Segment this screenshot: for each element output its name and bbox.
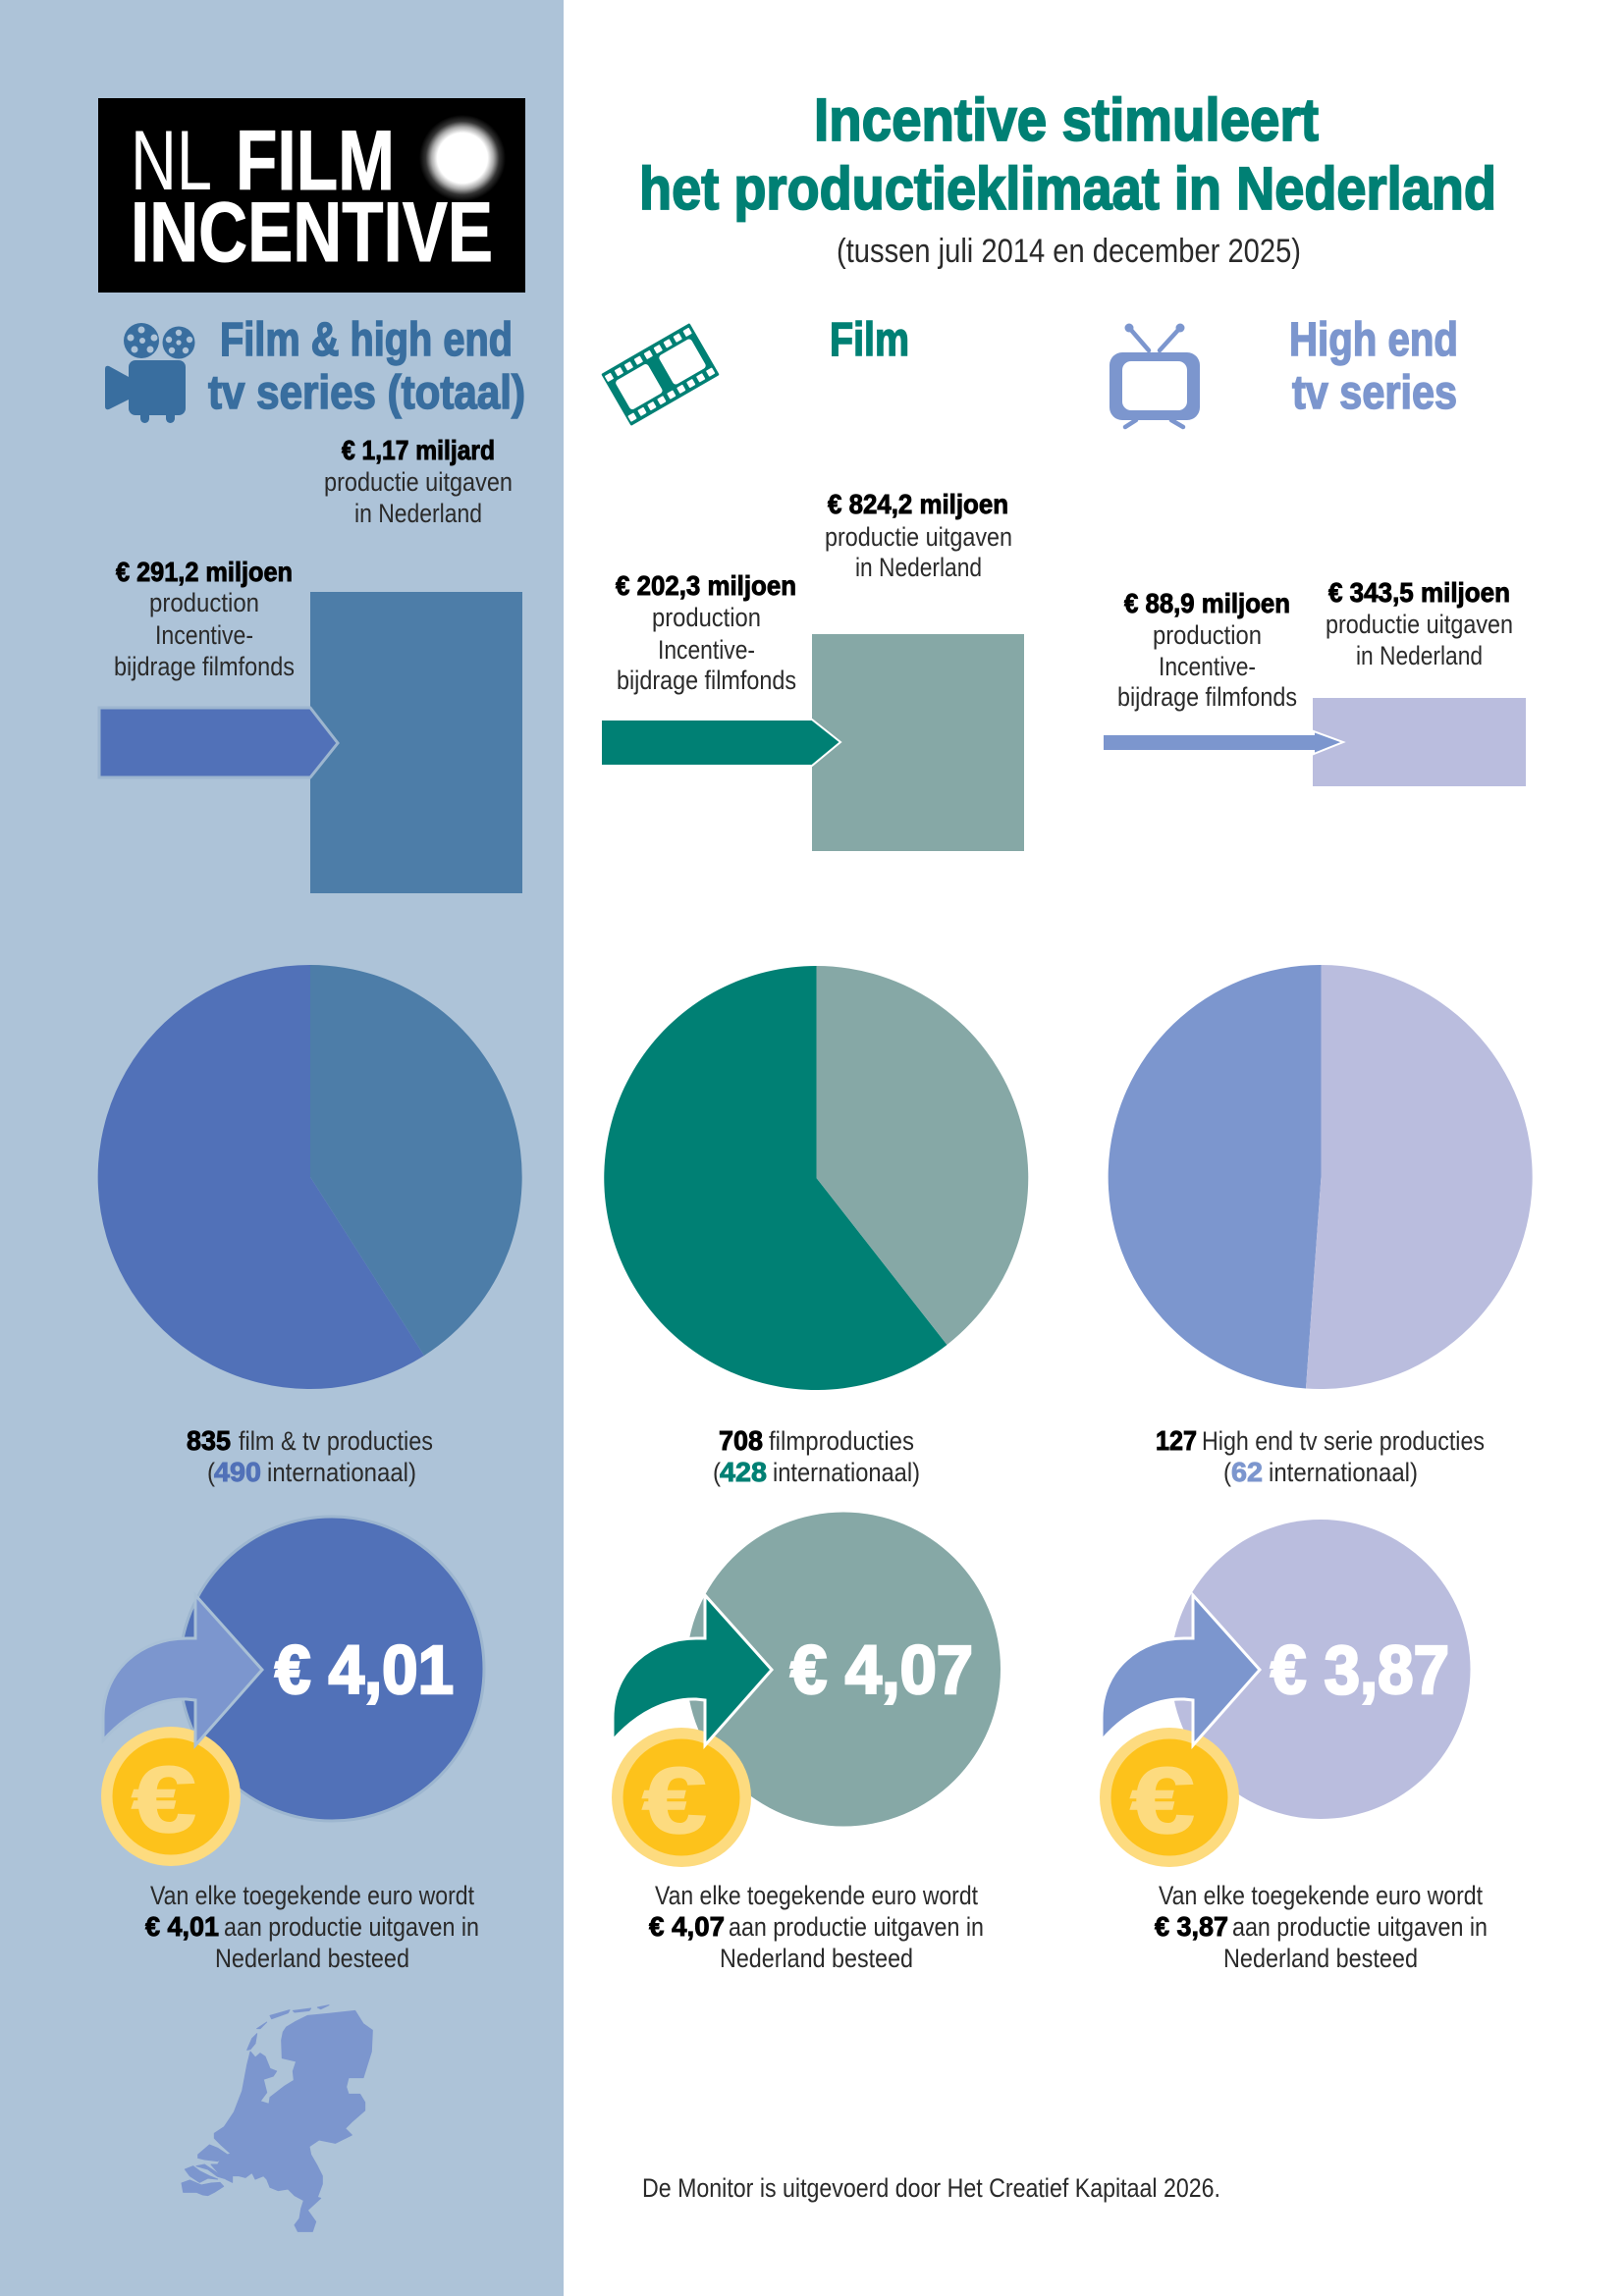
text: film explanation: € 4,07 [649, 1911, 725, 1942]
text: film production spend [825, 489, 1012, 582]
multiplier: tv 3,87 [1100, 1520, 1471, 1867]
heading: film and high end tv series total: Film & high end [220, 314, 513, 366]
text: total productions: 835 [187, 1425, 231, 1456]
pie chart: film [604, 966, 1028, 1390]
arrow: total contribution [99, 708, 338, 777]
text: tv explanation: Van elke toegekende euro wordt [1159, 1881, 1483, 1910]
text: tv incentive contribution: € 88,9 miljoen [1124, 588, 1290, 618]
panel: left column totals [0, 0, 564, 2296]
heading: film and high end tv series total: tv series (totaal) [208, 367, 525, 419]
text: film productions: filmproducties [769, 1426, 914, 1456]
icon: euro coin: € [132, 1747, 196, 1852]
arrow: coin to value [613, 1595, 772, 1745]
logo: NL Film Incentive: FILM [236, 114, 395, 208]
heading: film: Film [830, 314, 909, 366]
logo: NL Film Incentive: NL [131, 114, 212, 208]
pie chart: total [98, 965, 522, 1389]
text: total production spend: productie uitgaven [324, 467, 513, 497]
text: total productions: ( [207, 1458, 215, 1487]
text: film productions: 428 [720, 1457, 767, 1487]
bar: tv spend square [1313, 698, 1526, 786]
text: tv productions [1156, 1425, 1485, 1487]
logo: NL Film Incentive [98, 98, 525, 293]
text: film incentive contribution [616, 570, 796, 695]
bar: film spend square [812, 634, 1024, 851]
heading: film and high end tv series total [208, 314, 525, 419]
subtitle: (tussen juli 2014 en december 2025) [837, 233, 1301, 270]
multiplier: film 4,07 [612, 1512, 1001, 1867]
text: total incentive contribution: bijdrage filmfonds [114, 652, 295, 681]
icon: euro coin [1100, 1728, 1239, 1867]
logo: NL Film Incentive: INCENTIVE [131, 186, 493, 280]
text: film productions: internationaal) [773, 1458, 920, 1487]
text: tv explanation: € 3,87 [1155, 1911, 1228, 1942]
text: film explanation: Van elke toegekende euro wordt [655, 1881, 978, 1910]
text: tv incentive contribution: Incentive- [1159, 652, 1256, 681]
text: tv incentive contribution [1117, 588, 1297, 712]
text: total production spend: € 1,17 miljard [342, 435, 495, 465]
text: film production spend: productie uitgaven [825, 522, 1012, 552]
icon: euro coin [101, 1727, 241, 1866]
text: total incentive contribution: € 291,2 miljoen [116, 557, 293, 587]
text: film incentive contribution: Incentive- [658, 635, 755, 665]
text: total incentive contribution: production [149, 588, 259, 617]
text: total incentive contribution [114, 557, 295, 681]
bar: total spend square [310, 592, 522, 893]
icon: film strip [601, 323, 720, 426]
arrow: coin to value [103, 1595, 262, 1745]
text: total productions: film & tv producties [239, 1426, 433, 1456]
text: total explanation: € 4,01 [145, 1911, 219, 1942]
text: total incentive contribution: Incentive- [155, 620, 253, 650]
text: film incentive contribution: bijdrage filmfonds [617, 666, 796, 695]
icon: euro coin: € [1130, 1748, 1195, 1853]
text: tv explanation: Nederland besteed [1223, 1944, 1418, 1973]
footer note: De Monitor is uitgevoerd door Het Creatief Kapitaal 2026. [642, 2173, 1220, 2203]
text: total production spend [324, 435, 513, 528]
text: tv productions: 127 [1156, 1425, 1197, 1456]
text: tv production spend: € 343,5 miljoen [1328, 577, 1510, 608]
value: € 4,01 [275, 1631, 454, 1708]
text: film productions: ( [713, 1458, 721, 1487]
text: tv production spend [1326, 577, 1513, 670]
text: tv explanation: aan productie uitgaven in [1232, 1912, 1488, 1942]
text: total explanation [145, 1881, 479, 1973]
text: tv incentive contribution: production [1153, 620, 1262, 650]
text: film production spend: in Nederland [855, 553, 982, 582]
title [639, 86, 1496, 222]
icon: euro coin [612, 1728, 751, 1867]
text: tv productions: 62 [1231, 1457, 1263, 1487]
text: tv production spend: productie uitgaven [1326, 610, 1513, 639]
icon: map of the Netherlands [182, 2005, 372, 2231]
heading: high end tv series: tv series [1292, 367, 1457, 419]
value: € 4,07 [790, 1631, 973, 1708]
arrow: coin to value [1102, 1595, 1260, 1745]
text: film productions: 708 [719, 1425, 763, 1456]
text: film explanation [649, 1881, 984, 1973]
text: total production spend: in Nederland [354, 499, 482, 528]
text: total productions: 490 [214, 1457, 261, 1487]
value: € 3,87 [1271, 1631, 1449, 1708]
text: tv productions: High end tv serie producties [1202, 1426, 1485, 1456]
text: tv productions: ( [1223, 1458, 1231, 1487]
heading: high end tv series: High end [1289, 314, 1458, 366]
text: total explanation: aan productie uitgaven in [224, 1912, 479, 1942]
icon: euro coin: € [642, 1748, 707, 1853]
text: tv production spend: in Nederland [1356, 641, 1483, 670]
text: tv incentive contribution: bijdrage filmfonds [1117, 682, 1297, 712]
text: tv explanation [1155, 1881, 1488, 1973]
text: film incentive contribution: production [652, 603, 761, 632]
text: total productions [187, 1425, 433, 1487]
heading: high end tv series [1289, 314, 1458, 419]
text: film productions [713, 1425, 920, 1487]
text: film incentive contribution: € 202,3 miljoen [616, 570, 796, 601]
text: tv productions: internationaal) [1269, 1458, 1418, 1487]
text: total explanation: Nederland besteed [215, 1944, 409, 1973]
text: film production spend: € 824,2 miljoen [828, 489, 1008, 519]
icon: television [1110, 324, 1200, 427]
icon: film camera [105, 323, 194, 423]
text: total productions: internationaal) [267, 1458, 416, 1487]
title: het productieklimaat in Nederland [639, 155, 1496, 222]
arrow: film contribution [601, 720, 840, 766]
text: film explanation: Nederland besteed [720, 1944, 913, 1973]
arrow: tv contribution [1103, 731, 1343, 754]
text: film explanation: aan productie uitgaven in [729, 1912, 984, 1942]
text: total explanation: Van elke toegekende euro wordt [150, 1881, 474, 1910]
multiplier: total 4,01 [101, 1517, 484, 1866]
title: Incentive stimuleert [814, 86, 1319, 153]
pie chart: high end tv series [1109, 965, 1533, 1389]
